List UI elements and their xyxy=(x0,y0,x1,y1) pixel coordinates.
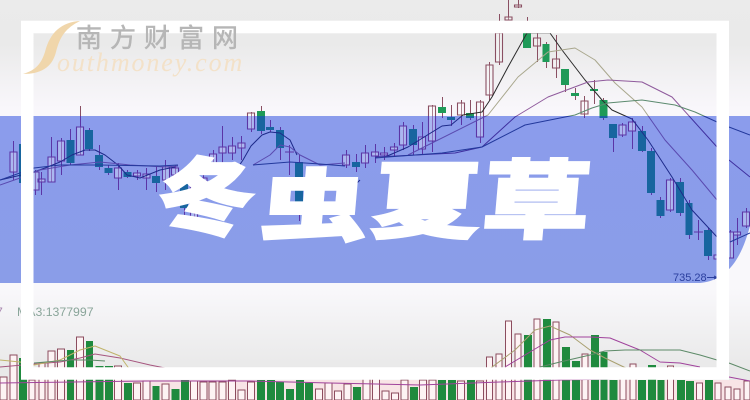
logo Chinese name: 南 xyxy=(76,23,102,53)
title: 草 xyxy=(478,154,595,249)
volume moving averages xyxy=(0,326,750,385)
price low arrow xyxy=(707,276,717,279)
green volume bars xyxy=(19,319,713,400)
logo Chinese name xyxy=(76,23,238,53)
logo: southmoney xyxy=(23,21,244,77)
title: 夏 xyxy=(368,157,484,249)
logo latin name: outhmoney.com xyxy=(57,48,244,77)
logo Chinese name: 方 xyxy=(110,23,136,53)
volume strip tint xyxy=(0,380,750,400)
title xyxy=(152,153,595,251)
candle wicks xyxy=(14,0,746,260)
logo S swoosh xyxy=(23,21,80,74)
price low label: 735.28 xyxy=(673,272,707,284)
blue band xyxy=(0,116,750,283)
hollow volume bars xyxy=(0,319,750,400)
logo Chinese name: 富 xyxy=(178,23,204,53)
title: 虫 xyxy=(257,164,372,251)
logo Chinese name: 网 xyxy=(212,23,238,53)
candlestick chart xyxy=(0,0,750,260)
moving average lines xyxy=(0,33,750,242)
volume chart xyxy=(0,319,750,400)
filled candle bodies xyxy=(19,33,712,256)
volume MA3 label: MA3:1377997 xyxy=(17,305,94,319)
hollow candle bodies xyxy=(10,5,750,259)
logo Chinese name: 财 xyxy=(144,23,170,53)
title: 冬 xyxy=(152,153,260,246)
